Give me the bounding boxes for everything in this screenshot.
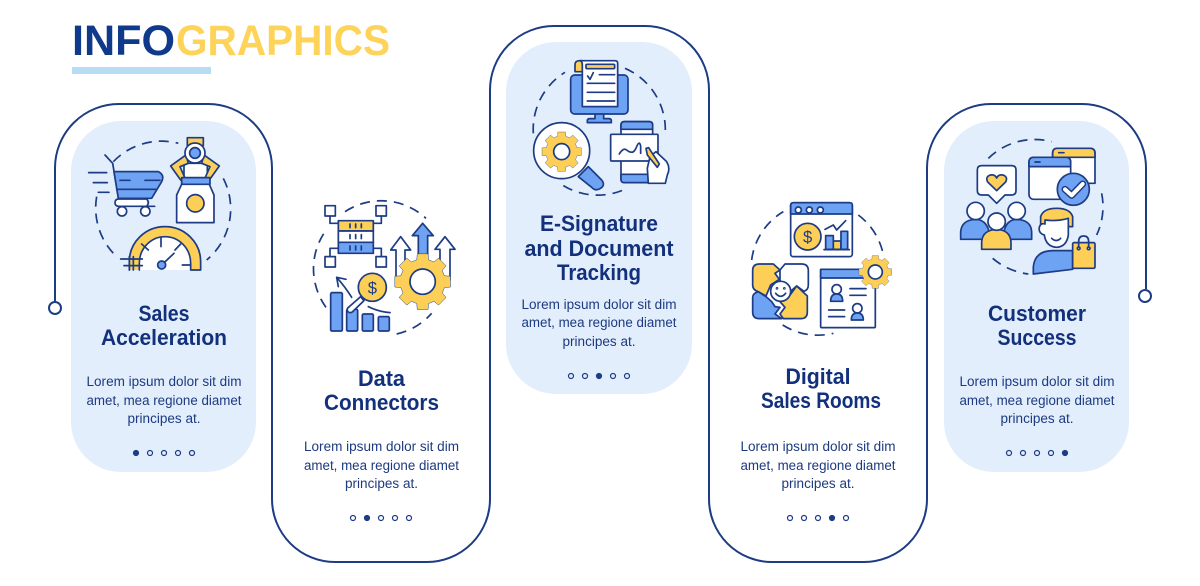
heading: E-Signature: [540, 211, 658, 236]
icon: dashboard, chat bubbles and profiles: $: [803, 228, 812, 247]
icon: dashboard, chat bubbles and profiles: [752, 203, 892, 335]
icon: monitor, magnifier and signature: [533, 61, 669, 195]
body text: Lorem ipsum dolor sit dim: [740, 439, 896, 454]
title: INFO: [72, 17, 175, 65]
panel: data connectors: [304, 201, 459, 520]
icon: customers, feedback and shopping: [961, 139, 1103, 274]
body text: principes at.: [345, 476, 418, 491]
heading: and Document: [524, 236, 674, 261]
pagination dots: [1006, 450, 1068, 456]
body text: amet, mea regione diamet: [86, 393, 242, 408]
pagination dots: [568, 374, 630, 378]
heading: Sales Rooms: [761, 388, 881, 413]
panel: customer success: [944, 121, 1129, 472]
heading: Customer: [988, 301, 1086, 326]
body text: amet, mea regione diamet: [740, 458, 896, 473]
title: GRAPHICS: [176, 17, 390, 65]
pagination dots: [350, 516, 412, 520]
panel: digital sales rooms: [740, 203, 896, 520]
body text: principes at.: [1000, 411, 1074, 426]
heading: Data: [358, 366, 405, 391]
heading: Success: [998, 325, 1076, 350]
body text: amet, mea regione diamet: [522, 315, 677, 330]
icon: server, gear and charts: [313, 201, 455, 334]
body text: Lorem ipsum dolor sit dim: [304, 439, 459, 454]
pagination dots: [788, 516, 848, 520]
body text: principes at.: [562, 334, 636, 349]
icon: server, gear and charts: $: [368, 278, 377, 297]
heading: Tracking: [557, 260, 641, 285]
body text: principes at.: [128, 411, 200, 426]
body text: Lorem ipsum dolor sit dim: [522, 297, 676, 312]
panel: sales acceleration: [71, 121, 256, 472]
body text: Lorem ipsum dolor sit dim: [960, 374, 1114, 389]
heading: Connectors: [324, 390, 439, 415]
body text: amet, mea regione diamet: [304, 458, 459, 473]
title: [72, 17, 390, 74]
heading: Sales: [138, 301, 190, 326]
body text: amet, mea regione diamet: [960, 393, 1115, 408]
body text: Lorem ipsum dolor sit dim: [86, 374, 242, 389]
panel: e-signature and document tracking: [506, 42, 692, 394]
pagination dots: [134, 450, 194, 456]
heading: Acceleration: [101, 325, 227, 350]
body text: principes at.: [782, 476, 854, 491]
heading: Digital: [786, 364, 850, 389]
icon: cart, bottle and speedometer: [89, 138, 231, 270]
